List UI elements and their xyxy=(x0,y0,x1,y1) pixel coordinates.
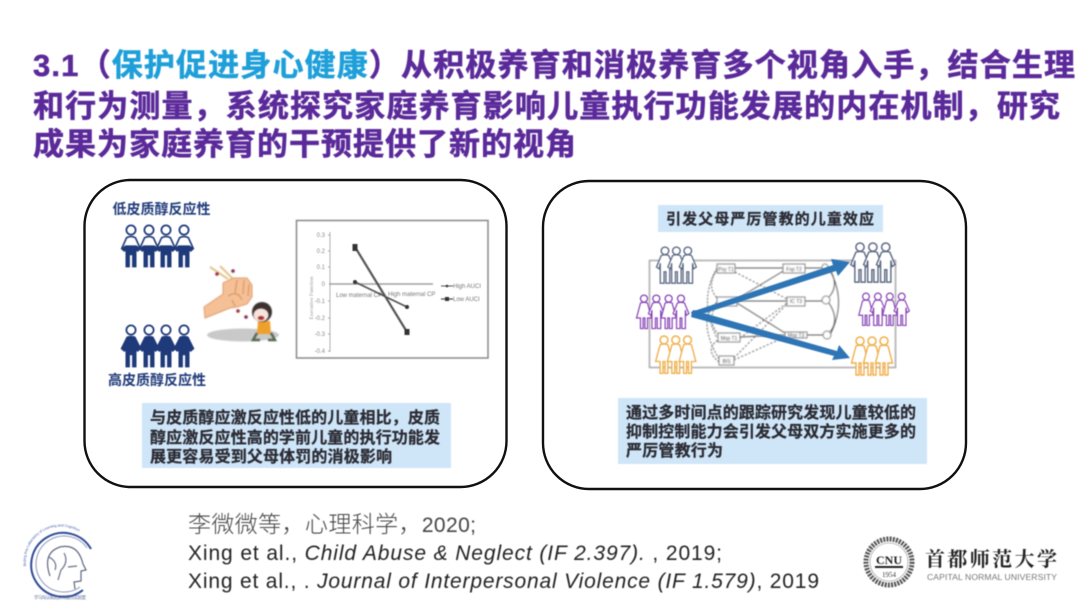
heading: child effects xyxy=(658,205,883,232)
icon: low reactivity children group xyxy=(121,225,194,267)
chart x axis labels: Low maternal CP xyxy=(336,293,382,299)
chart axis tick labels: -0.2 xyxy=(315,316,326,322)
chart axis tick labels: 0.2 xyxy=(317,249,326,255)
path model diagram xyxy=(650,260,896,368)
arrow: child to mothers xyxy=(691,310,850,360)
chart axis tick labels: -0.1 xyxy=(315,299,326,305)
citations: Xing et al., . Journal of Interpersonal Violence (IF 1.579), 2019 xyxy=(188,570,819,593)
logo: learning and cognition laboratory xyxy=(22,524,92,601)
caption: left finding: 与皮质醇应激反应性低的儿童相比，皮质 xyxy=(150,408,440,427)
heading: low cortisol reactivity: 低皮质醇反应性 xyxy=(112,201,210,217)
chart x axis labels xyxy=(336,292,435,299)
citations: Xing et al., Child Abuse & Neglect (IF 2.397). , 2019; xyxy=(188,542,722,565)
heading: child effects: 引发父母严厉管教的儿童效应 xyxy=(666,210,874,228)
logo lower text: 学习与认知北京市重点实验室 xyxy=(34,594,86,601)
model variable labels: Psy T1 xyxy=(718,267,734,273)
model variable labels: Msp T1 xyxy=(721,336,738,342)
caption: right finding: 严厉管教行为 xyxy=(626,441,723,460)
logo: Capital Normal University xyxy=(866,539,1057,585)
model variable labels: BIS xyxy=(722,359,731,365)
caption: right finding: 通过多时间点的跟踪研究发现儿童较低的 xyxy=(626,403,916,422)
chart x axis labels: High maternal CP xyxy=(388,292,435,298)
icon: grey fathers left xyxy=(656,247,696,283)
citations: 李微微等，心理科学，2020; xyxy=(188,511,476,537)
model variable labels xyxy=(718,267,805,365)
model variable labels: IC T3 xyxy=(790,299,802,305)
caption: left finding: 醇应激反应性高的学前儿童的执行功能发 xyxy=(150,428,440,447)
model variable labels: Fsp T2 xyxy=(786,267,802,273)
icon: orange mothers left xyxy=(656,336,696,373)
panel: child effects on harsh parenting xyxy=(543,181,966,489)
citations xyxy=(188,511,819,593)
caption: right finding xyxy=(618,398,927,464)
model variable boxes xyxy=(717,264,831,365)
university name English: CAPITAL NORMAL UNIVERSITY xyxy=(927,572,1057,582)
caption: left finding xyxy=(142,403,451,468)
chart legend: High AUCI xyxy=(453,284,481,290)
chart legend: Low AUCI xyxy=(453,297,480,303)
icon: grey fathers right xyxy=(851,243,895,282)
icon: purple children right xyxy=(859,293,909,325)
chart y axis title: Executive Function xyxy=(309,276,315,319)
chart series lines xyxy=(352,244,410,335)
title: 3.1（保护促进身心健康）从积极养育和消极养育多个视角入手，结合生理 xyxy=(33,48,1075,83)
icon: fist punishing a child xyxy=(204,266,279,342)
chart axis tick labels: -0.4 xyxy=(315,349,326,355)
title: 成果为家庭养育的干预提供了新的视角 xyxy=(33,127,576,162)
chart axis tick labels: 0 xyxy=(322,282,326,288)
chart axis tick labels: 0.3 xyxy=(317,233,326,239)
icon: high reactivity children group xyxy=(121,325,194,367)
title: 和行为测量，系统探究家庭养育影响儿童执行功能发展的内在机制，研究 xyxy=(33,89,1060,124)
logo ring text: Beijing Key Laboratory of Learning and Cognition xyxy=(22,524,80,567)
line chart: executive function by maternal CP xyxy=(296,220,488,358)
seal text: CNU xyxy=(876,553,902,567)
icon: purple children left xyxy=(637,295,689,329)
chart legend xyxy=(441,284,481,303)
icon: orange mothers right xyxy=(852,337,892,375)
chart axis tick labels: 0.1 xyxy=(317,265,326,271)
arrow: child to fathers xyxy=(691,259,850,317)
heading: high cortisol reactivity: 高皮质醇反应性 xyxy=(108,372,206,388)
model variable labels: Msp T3 xyxy=(788,333,805,339)
seal year: 1954 xyxy=(882,571,896,579)
chart axis tick labels: -0.3 xyxy=(315,332,326,338)
university name Chinese: 首都师范大学 xyxy=(925,543,1057,572)
chart axis tick labels xyxy=(315,233,326,355)
panel: cortisol reactivity and physical punishment xyxy=(84,180,506,487)
caption: right finding: 抑制控制能力会引发父母双方实施更多的 xyxy=(626,422,916,441)
caption: left finding: 展更容易受到父母体罚的消极影响 xyxy=(150,447,392,466)
title xyxy=(33,48,1075,162)
